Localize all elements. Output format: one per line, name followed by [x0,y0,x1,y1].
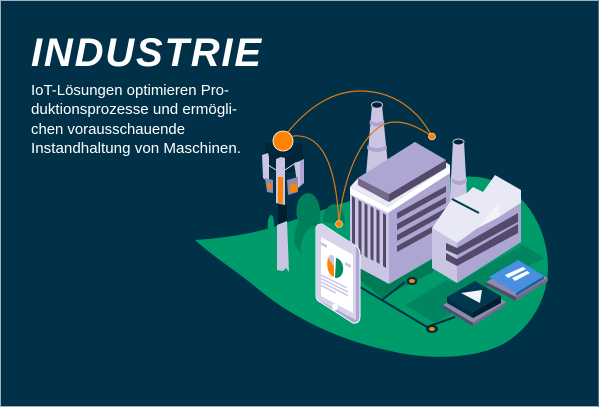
factory hall [432,175,521,283]
main building [350,142,450,284]
building shadow and circuit [360,245,545,333]
orange node center [336,220,342,228]
left wall [350,190,389,284]
chimney right [449,139,468,215]
antenna tower [262,143,304,272]
orange node large [273,131,293,151]
connection arcs [288,91,432,223]
text block: description: IoT-Lösungen optimieren Pro- [31,82,229,99]
orange node top right [428,133,436,140]
sector panels [262,153,269,183]
roof slab [358,160,446,202]
text block: description: chen vorausschauende [31,121,185,138]
chimney left [366,102,388,175]
windows left [352,196,386,268]
tablet [316,224,360,323]
text block: description [31,82,241,157]
pie chart [327,255,343,278]
title: INDUSTRIE [31,31,262,75]
windows right [397,186,446,252]
text block: description: Instandhaltung von Maschinen. [31,140,241,157]
right wall [389,172,450,284]
green leaf [195,176,548,357]
white band [350,165,450,213]
button: pause [486,260,548,301]
button: play [443,281,506,326]
trees [268,193,345,262]
text block: description: duktionsprozesse und ermögli- [31,101,237,118]
